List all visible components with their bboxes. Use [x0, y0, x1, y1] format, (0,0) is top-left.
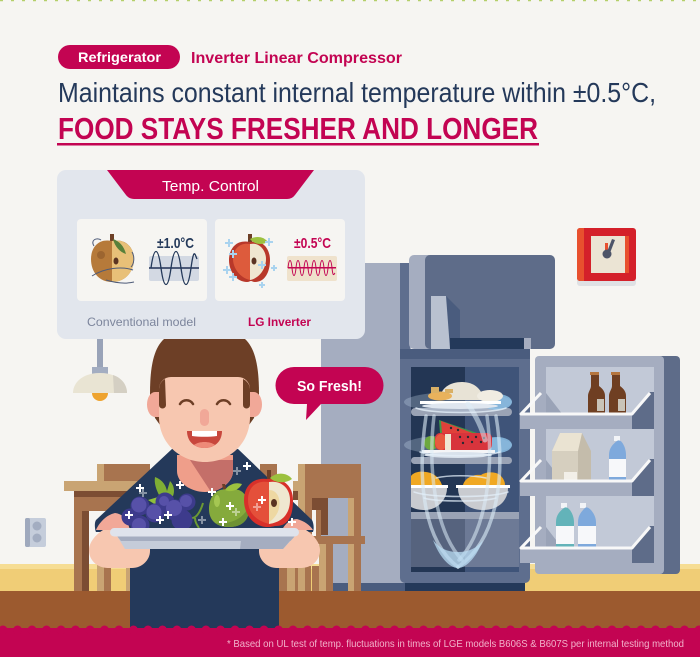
nose — [200, 409, 209, 426]
fridge base shadow — [405, 583, 525, 591]
refrigerator — [321, 255, 680, 591]
cold air swirl — [414, 404, 508, 568]
neck — [177, 455, 233, 492]
sparkles — [125, 462, 296, 526]
panel: temp control — [57, 170, 365, 339]
red apple — [244, 470, 293, 527]
right chair — [290, 464, 365, 591]
table behind the person — [64, 464, 319, 591]
floor and baseboard — [0, 564, 700, 629]
chilled air halos — [404, 392, 512, 455]
fridge body — [321, 263, 411, 591]
grapes — [122, 477, 203, 534]
chart: wide wave — [149, 252, 199, 284]
hands and arms — [89, 530, 320, 568]
open fridge door — [520, 356, 680, 574]
sideburns — [159, 379, 250, 409]
fridge frame — [400, 263, 530, 583]
door bins — [520, 393, 650, 563]
upper forearms — [96, 513, 313, 530]
fridge interior — [411, 367, 519, 572]
label: conventional model: Conventional model — [87, 315, 196, 329]
tray — [110, 528, 299, 549]
face — [159, 377, 250, 462]
icon: spoiled apple — [91, 234, 134, 283]
category pill: Refrigerator — [78, 49, 162, 65]
person holding tray — [89, 339, 320, 629]
water bottle — [609, 436, 626, 480]
ceiling lamp — [73, 335, 127, 401]
ears — [147, 392, 262, 417]
fridge base — [333, 583, 405, 591]
green apple — [209, 483, 249, 527]
food on top shelf — [420, 382, 503, 409]
label: LG Inverter: LG Inverter — [248, 315, 311, 329]
category pill — [58, 45, 180, 69]
eyes — [180, 400, 230, 404]
icon: fresh apple — [223, 234, 277, 288]
smile — [187, 431, 222, 448]
card: LG Inverter — [215, 219, 345, 329]
footer band — [0, 628, 700, 657]
neck shadow — [190, 460, 233, 492]
subtitle: Inverter Linear Compressor — [191, 50, 402, 67]
bin side shading — [546, 392, 654, 563]
fruit bowls on lower shelf — [411, 472, 510, 510]
speech bubble — [276, 367, 384, 420]
watermelon and salad on middle shelf — [422, 420, 495, 458]
reading: plus minus 1.0: ±1.0°C — [157, 235, 194, 252]
wall socket — [25, 518, 46, 547]
wall clock — [577, 228, 636, 286]
main claim: FOOD STAYS FRESHER AND LONGER — [58, 112, 538, 146]
hair — [150, 339, 259, 425]
panel banner: Temp. Control — [162, 179, 259, 195]
teal and blue bottles — [556, 503, 596, 547]
freezer door — [409, 255, 555, 349]
panel banner — [107, 170, 314, 199]
frame top band — [400, 349, 530, 359]
speech bubble: So Fresh! — [297, 378, 362, 395]
beer bottles — [588, 372, 626, 413]
milk carton — [552, 433, 591, 480]
reading: plus minus 0.5: ±0.5°C — [294, 235, 331, 252]
card: conventional model — [77, 219, 207, 329]
chart: narrow wave — [287, 256, 337, 281]
torso — [95, 449, 314, 629]
